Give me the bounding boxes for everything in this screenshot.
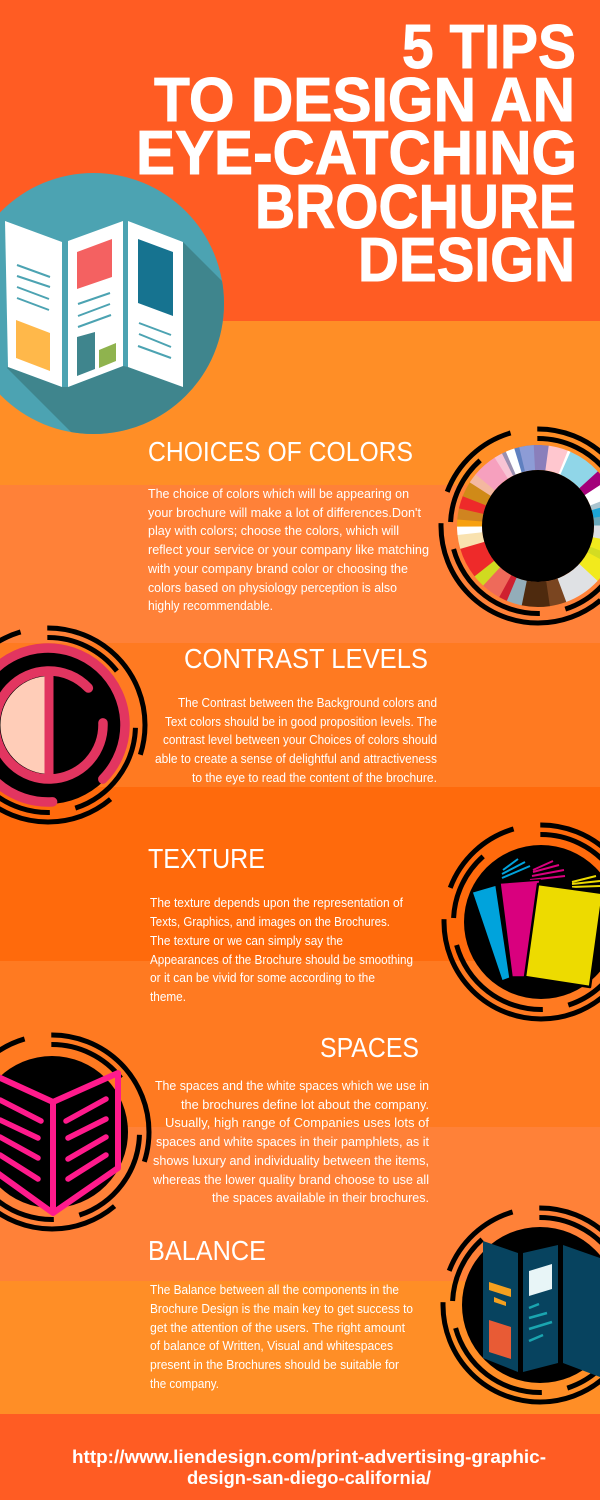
text block: texture: The texture depends upon the representation of [150,896,404,910]
icon: hero brochure [0,173,224,434]
panel: balance [148,1208,600,1402]
text block: texture: theme. [150,990,186,1004]
panel: contrast levels [0,628,437,822]
text block: contrast levels: Text colors should be in good proposition levels. The [165,715,437,729]
text block: choices of colors: highly recommendable. [148,599,273,613]
text block: texture [150,896,413,1004]
icon: contrast circle [0,628,145,822]
text block: balance [150,1283,413,1391]
panel: texture [148,825,600,1019]
footer url: design-san-diego-california/ [187,1468,431,1488]
text block: texture: Appearances of the Brochure should be smoothing [150,953,413,967]
title: DESIGN [358,226,575,295]
text block: balance: present in the Brochures should be suitable for [150,1358,399,1372]
text block: contrast levels [155,696,437,785]
title [136,13,577,295]
heading: choices of colors: CHOICES OF COLORS [148,436,413,467]
text block: spaces [152,1079,430,1205]
text block: balance: The Balance between all the components in the [150,1283,399,1297]
title: 5 TIPS [402,13,576,82]
text block: contrast levels: The Contrast between the Background colors and [178,696,437,710]
text block: spaces: whereas the lower quality brand choose to use all [152,1173,429,1187]
text block: choices of colors: reflect your service or your company like matching [148,543,429,557]
text block: texture: The texture or we can simply say the [150,934,343,948]
title: TO DESIGN AN [154,66,575,135]
text block: choices of colors: your brochure will make a lot of differences.Don't [148,506,422,520]
text block: choices of colors: with your company brand color or choosing the [147,562,408,576]
heading: balance: BALANCE [148,1235,266,1266]
text block: balance: Brochure Design is the main key to get success to [150,1302,413,1316]
icon: fanned brochures [444,825,600,1019]
heading: texture: TEXTURE [148,843,265,874]
text block: spaces: the brochures define lot about the company. [181,1098,429,1112]
text block: balance: get the attention of the users. The right amount [150,1321,406,1335]
title: EYE-CATCHING [136,119,577,188]
icon: open book [0,1035,149,1229]
text block: choices of colors [147,487,429,613]
text block: texture: or it can be vivid for some according to the [150,971,375,985]
footer url: http://www.liendesign.com/print-advertising-graphic- [72,1447,546,1467]
text block: spaces: Usually, high range of Companies uses lots of [165,1116,430,1130]
text block: texture: Texts, Graphics, and images on the Brochures. [150,915,390,929]
text block: choices of colors: The choice of colors which will be appearing on [148,487,409,501]
icon: tri-fold brochure [443,1208,600,1402]
text block: contrast levels: to the eye to read the content of the brochure. [192,771,437,785]
text block: spaces: The spaces and the white spaces which we use in [155,1079,429,1093]
text block: balance: of balance of Written, Visual and whitespaces [150,1339,393,1353]
panel: spaces [0,1032,430,1229]
footer url [72,1447,546,1488]
text block: contrast levels: contrast level between your Choices of colors should [163,733,437,747]
text block: spaces: spaces and white spaces in their pamphlets, as it [156,1135,430,1149]
icon: color wheel [441,429,600,623]
heading: contrast levels: CONTRAST LEVELS [184,643,428,674]
heading: spaces: SPACES [320,1032,419,1063]
text block: contrast levels: able to create a sense of delightful and attractiveness [155,752,437,766]
text block: spaces: the spaces available in their brochures. [212,1191,429,1205]
text block: choices of colors: colors based on physiology perception is also [148,581,397,595]
text block: balance: the company. [150,1377,219,1391]
panel: choices of colors [147,429,600,623]
text block: choices of colors: play with colors; choose the colors, which will [148,524,399,538]
text block: spaces: shows luxury and individuality between the items, [153,1154,429,1168]
